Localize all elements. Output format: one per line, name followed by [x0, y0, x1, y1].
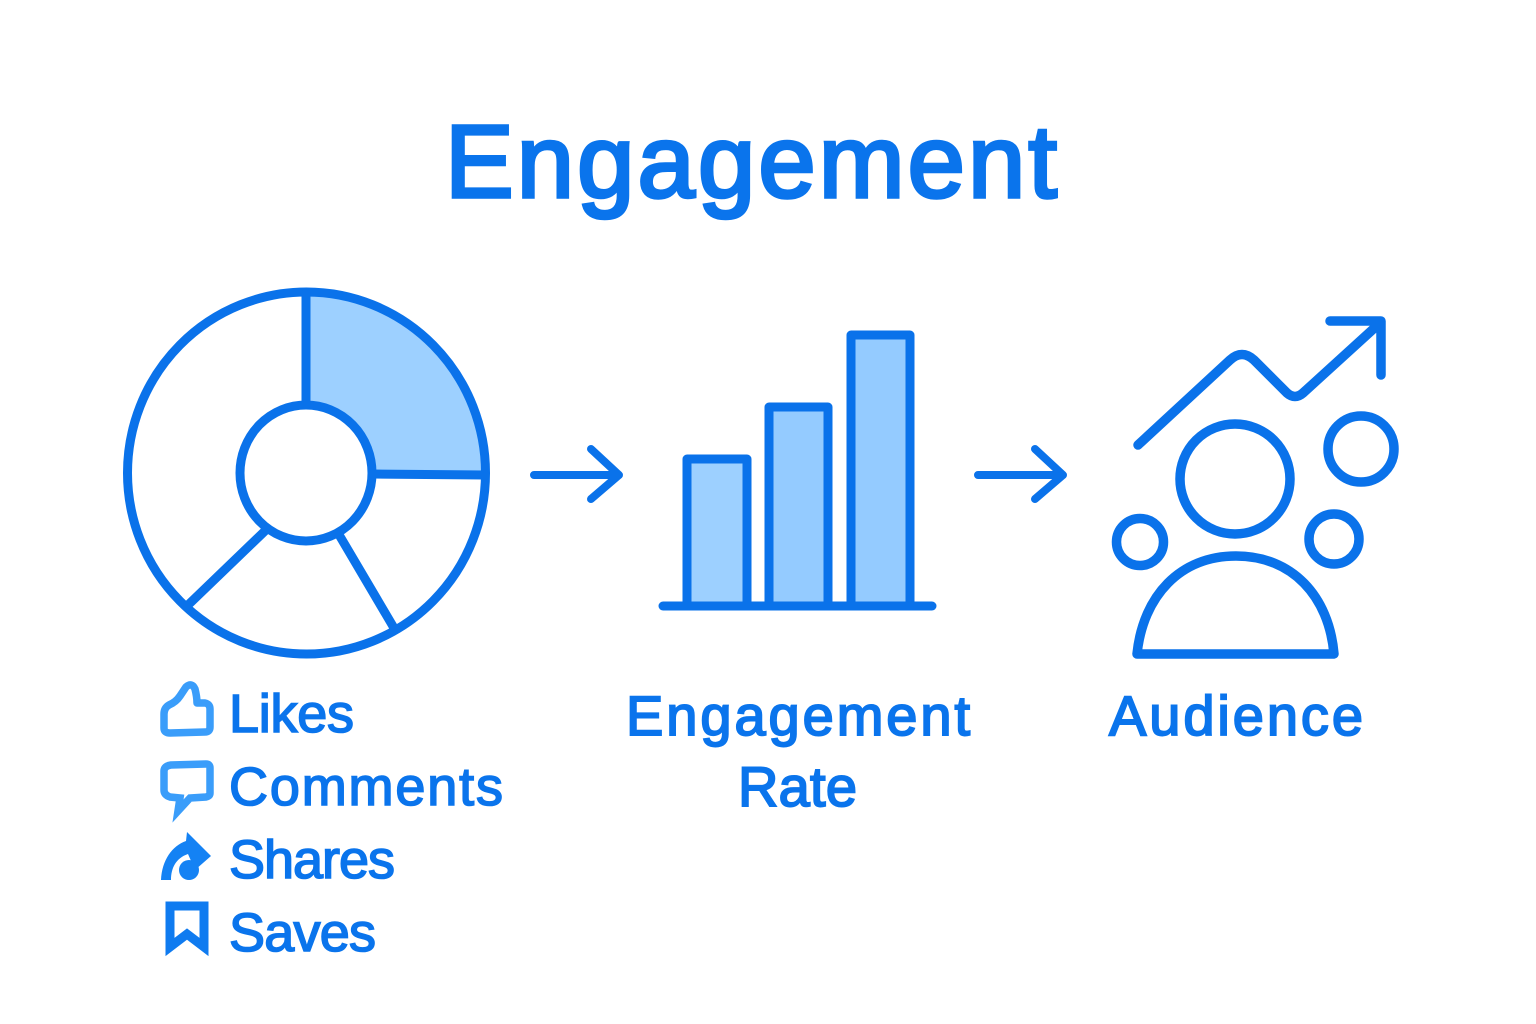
baseline: [663, 602, 932, 610]
highlighted quarter segment: [306, 292, 486, 473]
icon: bookmark: [170, 906, 204, 947]
title: Engagement: [445, 104, 1057, 219]
bar 3: [851, 335, 910, 606]
legend: [161, 684, 503, 963]
icon: thumbs up: [164, 685, 210, 733]
small circle right top: [1328, 416, 1394, 482]
label: engagement rate: [626, 684, 970, 818]
arrow: bars to audience: [978, 449, 1063, 499]
icon: audience with growth arrow: [1116, 321, 1394, 654]
segment dividers: [187, 293, 485, 628]
label: engagement rate: Engagement: [626, 684, 970, 747]
label: engagement rate: Rate: [738, 755, 857, 818]
inner ring: [240, 405, 372, 541]
label: audience: Audience: [1109, 684, 1363, 747]
small circle left: [1116, 518, 1164, 566]
icon: segmented donut chart: [128, 292, 486, 654]
label: comments: Comments: [229, 757, 503, 817]
main head: [1180, 424, 1290, 534]
label: shares: Shares: [229, 830, 395, 890]
arrow: donut to bars: [534, 449, 619, 499]
icon: speech bubble: [164, 764, 210, 811]
bar 2: [769, 407, 828, 606]
growth line: [1138, 321, 1381, 445]
outer ring: [128, 292, 486, 654]
main shoulders: [1137, 556, 1334, 654]
icon: bar chart: [663, 335, 932, 606]
bar 1: [687, 459, 747, 606]
icon: share arrow: [161, 832, 211, 880]
label: saves: Saves: [229, 903, 376, 963]
small circle right: [1309, 514, 1359, 564]
label: likes: Likes: [229, 684, 354, 744]
